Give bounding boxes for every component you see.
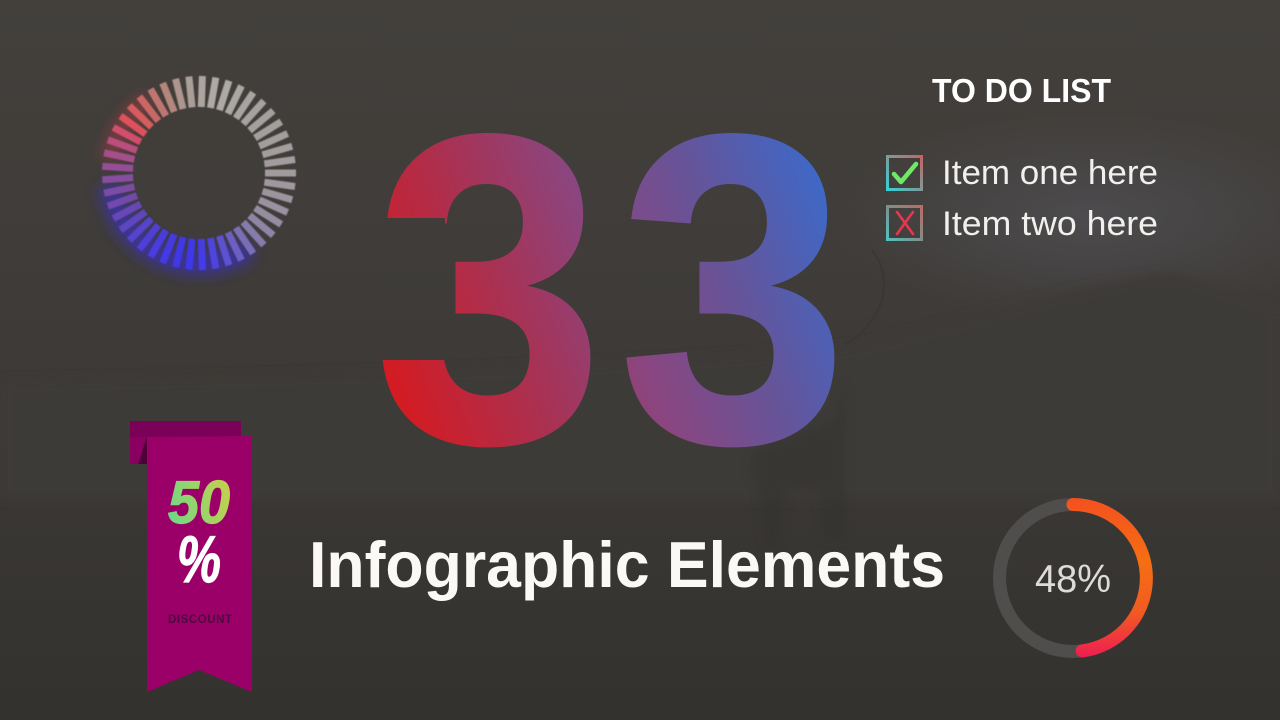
50: 50: [168, 469, 230, 536]
donut chart 48%: [1000, 504, 1146, 652]
item two label: Item two here: [942, 205, 1158, 243]
donut value label: 48%: [1035, 558, 1111, 601]
ribbon back fold: [130, 421, 241, 464]
big number 33: [382, 133, 834, 448]
donut track: [1000, 504, 1146, 652]
item one: checked box: [888, 156, 922, 190]
donut value arc: [1073, 504, 1146, 651]
to do list: [888, 72, 1158, 243]
discount ribbon: [130, 421, 252, 692]
big number 33: 3: [618, 45, 848, 535]
discount label: DISCOUNT: [168, 614, 232, 626]
item one label: Item one here: [942, 154, 1158, 192]
percent sign: %: [177, 522, 221, 596]
ribbon body: [147, 436, 252, 692]
ring glow: [110, 100, 250, 264]
item two: crossed box: [888, 206, 922, 240]
radial progress ring of gradient bars: [102, 76, 296, 270]
big number 33: 3: [374, 45, 604, 535]
title: Infographic Elements: [309, 528, 945, 601]
to do list heading: TO DO LIST: [932, 72, 1111, 109]
